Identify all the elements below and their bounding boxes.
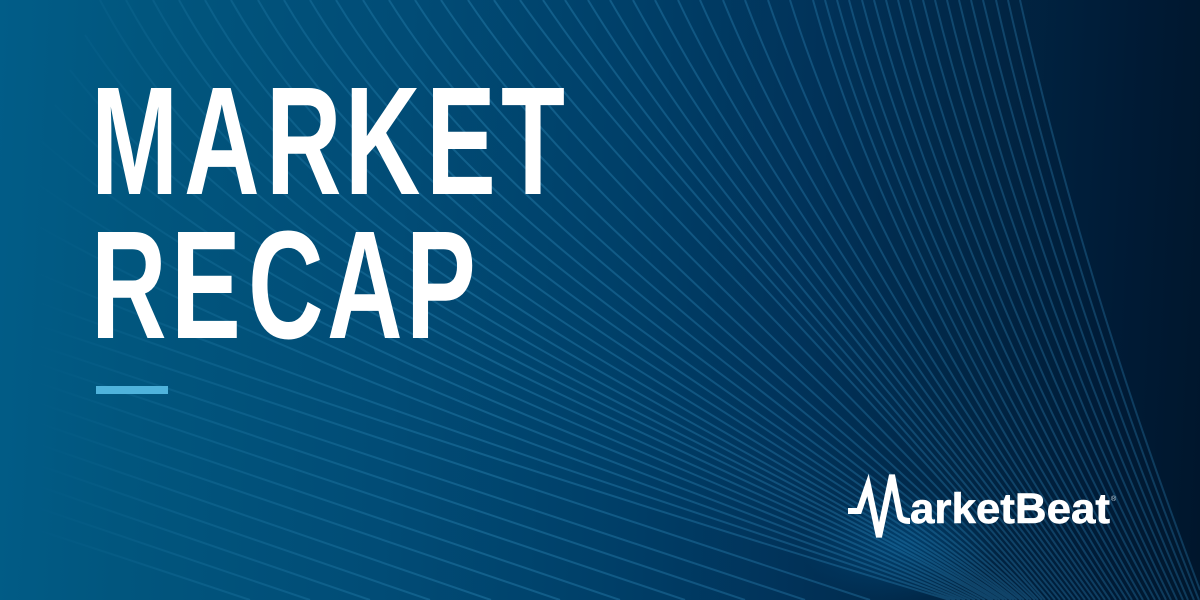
title line: MARKET: MARKET — [91, 55, 565, 227]
registered mark: ® — [1111, 495, 1117, 503]
title — [91, 55, 565, 371]
accent bar — [96, 386, 168, 394]
icon: heartbeat pulse M — [848, 475, 910, 537]
logo wordmark: arketBeat — [910, 485, 1110, 533]
logo: MarketBeat — [848, 475, 1117, 537]
title line: RECAP: RECAP — [91, 199, 476, 371]
